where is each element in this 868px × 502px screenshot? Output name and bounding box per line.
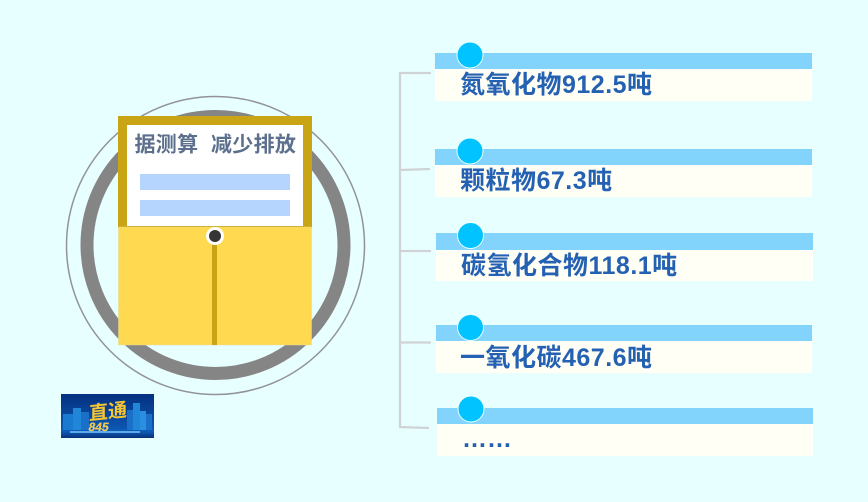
logo badge: 845 bbox=[87, 420, 110, 434]
pocket center strip bbox=[212, 240, 217, 345]
placeholder bar 2 bbox=[140, 200, 290, 216]
label: 一氧化碳467.6吨 bbox=[460, 344, 653, 372]
yellow pocket bbox=[118, 227, 312, 345]
bullet bbox=[457, 42, 483, 68]
bullet bbox=[458, 396, 484, 422]
card gold frame bbox=[118, 116, 312, 228]
bracket connector bbox=[400, 73, 431, 428]
logo text: 直通 bbox=[89, 399, 127, 425]
bullet bbox=[458, 222, 484, 248]
item: 一氧化碳 bbox=[436, 314, 812, 373]
logo badge bbox=[61, 394, 154, 438]
bullet bbox=[458, 314, 484, 340]
outer thin ring bbox=[66, 96, 364, 394]
placeholder bar 1 bbox=[140, 174, 290, 190]
item: 颗粒物 bbox=[435, 138, 812, 197]
label: 氮氧化物912.5吨 bbox=[460, 71, 653, 99]
pin bbox=[206, 227, 224, 245]
label: 碳氢化合物118.1吨 bbox=[461, 252, 678, 280]
card heading: 减少排放 bbox=[211, 134, 296, 156]
card heading: 据测算 bbox=[134, 134, 198, 156]
label: …… bbox=[462, 425, 512, 453]
item: ellipsis bbox=[437, 396, 813, 456]
card white sheet bbox=[127, 125, 303, 226]
clipboard card bbox=[118, 116, 312, 345]
item: 氮氧化物 bbox=[435, 42, 812, 101]
thick gray ring bbox=[87, 116, 344, 374]
bullet bbox=[457, 138, 483, 164]
item: 碳氢化合物 bbox=[436, 222, 813, 281]
label: 颗粒物67.3吨 bbox=[460, 167, 613, 195]
